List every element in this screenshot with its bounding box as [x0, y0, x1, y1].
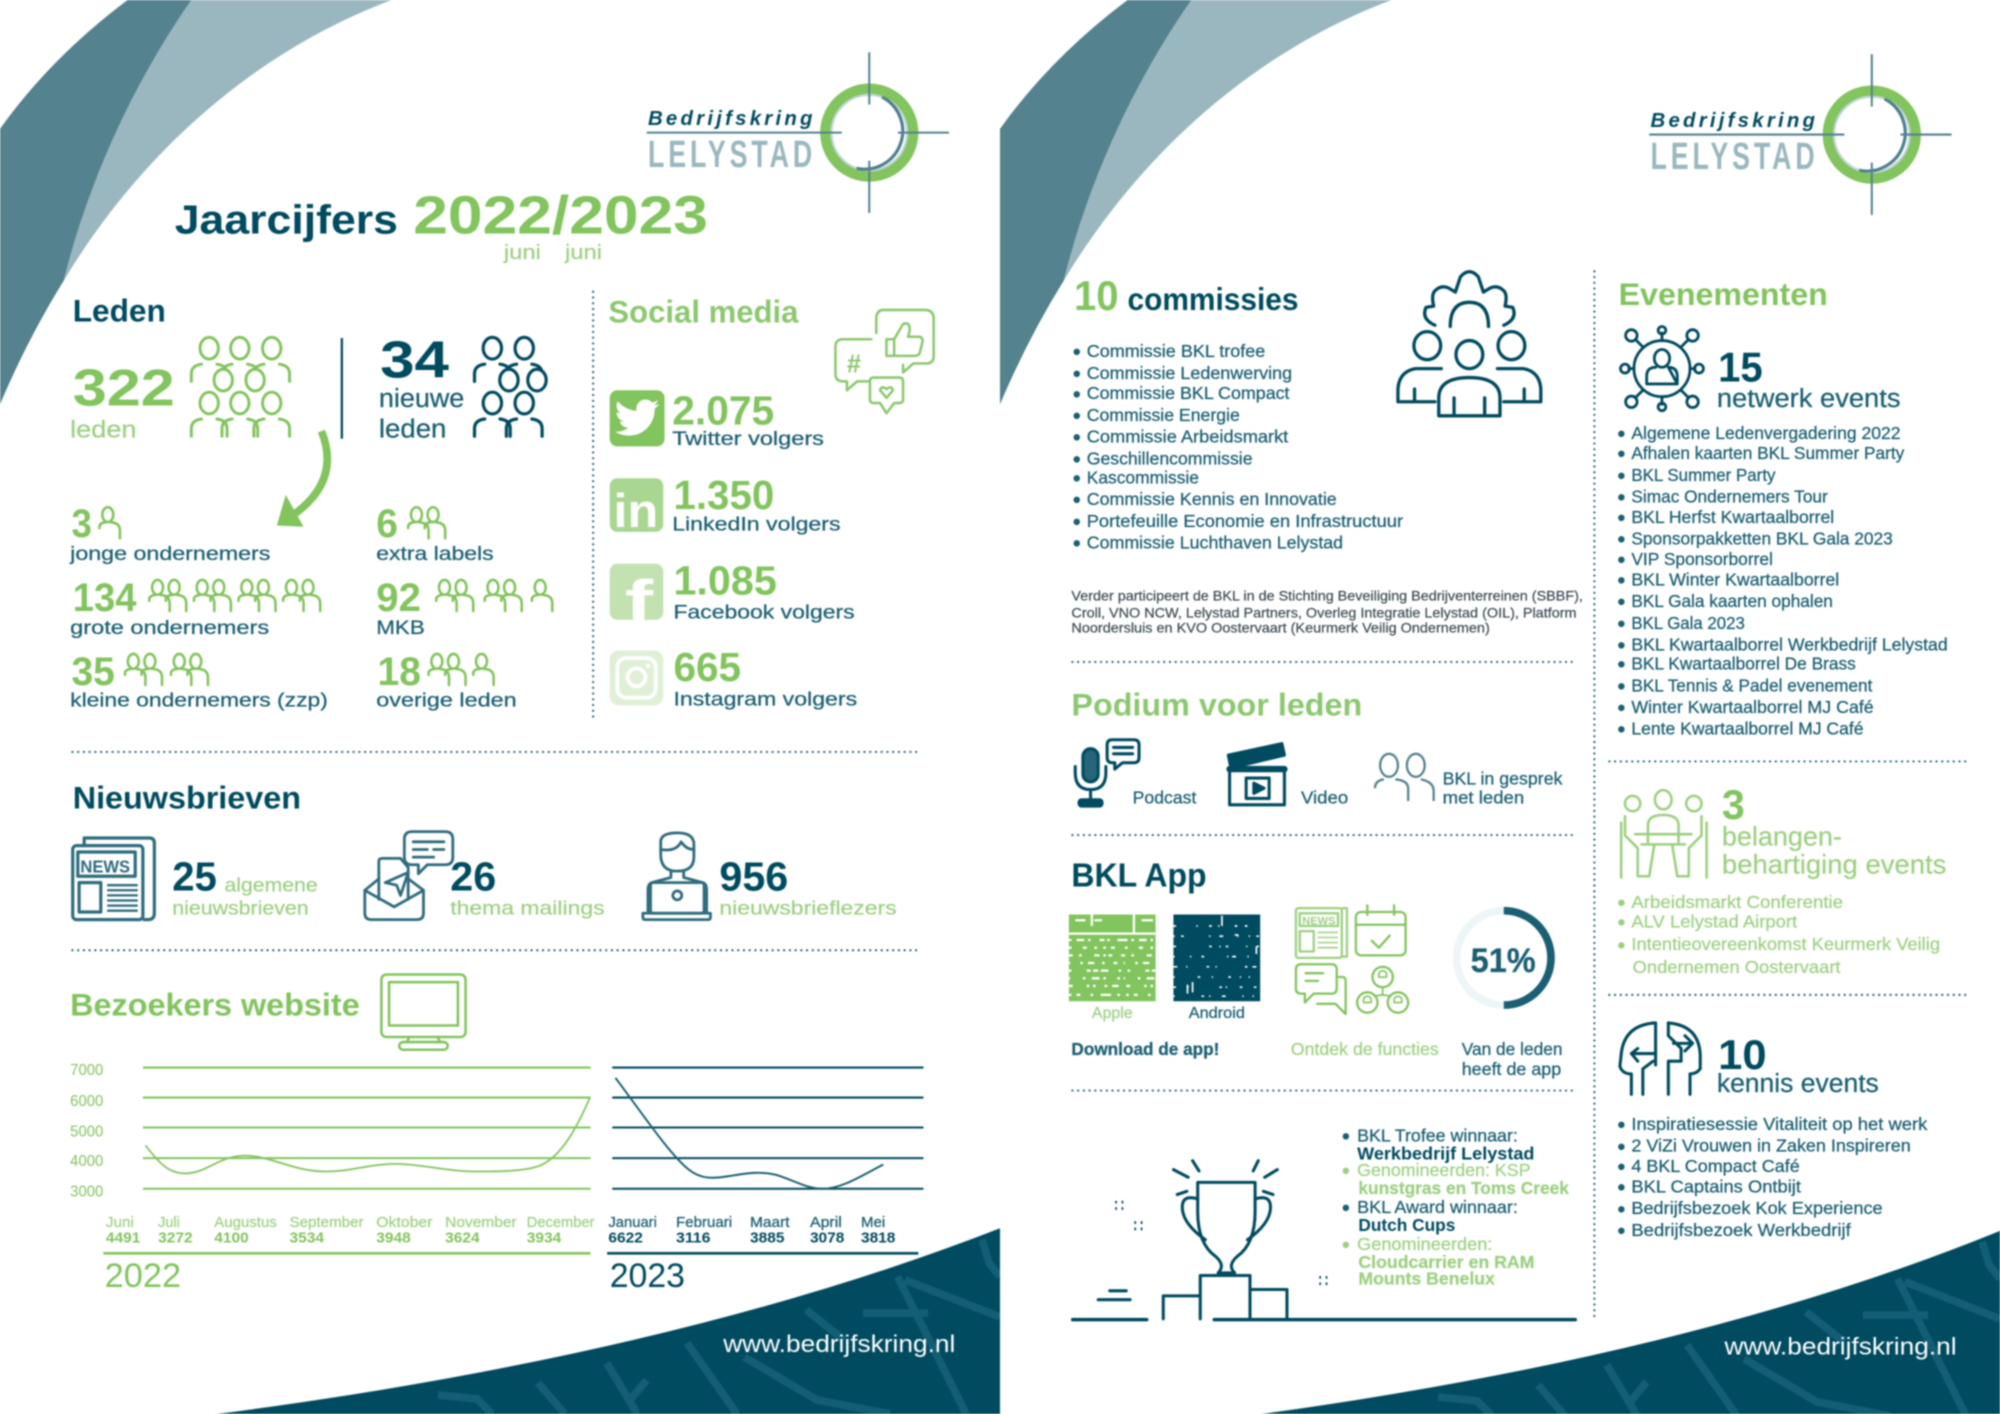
list: trofee and award: Genomineerden: KSP [1357, 1160, 1531, 1180]
icon: reader with laptop [643, 833, 710, 920]
list: kennis events [1617, 1112, 1928, 1243]
logo: Bedrijfskring Lelystad, page 2: LELYSTAD [1650, 134, 1815, 177]
list: commissies [1073, 339, 1403, 556]
label: bkl in gesprek met leden [1443, 768, 1563, 808]
list: commissies: • [1073, 360, 1081, 386]
heading: 10 commissies: 10 [1074, 272, 1119, 319]
list: kennis events: • [1617, 1217, 1625, 1243]
title: Jaarcijfers [175, 196, 398, 242]
stat: 26 thema mailings: 26 [450, 853, 496, 899]
icon: network events [1621, 327, 1703, 411]
title: juni [564, 242, 602, 264]
list: kennis events: • [1617, 1154, 1625, 1180]
list: commissies: Commissie Luchthaven Lelystad [1087, 532, 1343, 552]
stat: extra labels [376, 502, 494, 565]
list: trofee and award [1342, 1123, 1569, 1288]
line chart: visitors 2022: 2022 [105, 1257, 181, 1295]
list: kennis events: • [1617, 1196, 1625, 1222]
stat: 10 kennis events: 10 [1718, 1031, 1767, 1078]
list: commissies: Commissie BKL Compact [1087, 383, 1290, 403]
list: netwerk events: • [1617, 441, 1625, 467]
stat: 25 algemene nieuwsbrieven [172, 853, 318, 920]
line chart: visitors 2023: 3116 [676, 1230, 710, 1246]
list: trofee and award: Mounts Benelux [1358, 1268, 1495, 1288]
icon: heads with arrows [1620, 1023, 1700, 1094]
label: download de app: Download de app! [1071, 1039, 1219, 1059]
line chart: visitors 2022: Juni [106, 1215, 134, 1231]
line chart: visitors 2023: Februari [676, 1215, 732, 1231]
list: commissies: • [1073, 465, 1081, 491]
heading: podium voor leden: Podium voor leden [1071, 687, 1362, 723]
donut chart: 51% [1457, 911, 1551, 1005]
stat: 34 nieuwe leden: leden [379, 415, 446, 443]
line chart: visitors 2022: 6000 [70, 1093, 103, 1110]
list: netwerk events: BKL Gala 2023 [1631, 613, 1745, 633]
list: netwerk events: Algemene Ledenvergadering 2022 [1631, 423, 1900, 443]
line chart: visitors 2022: 4491 [106, 1230, 140, 1246]
list: netwerk events: VIP Sponsorborrel [1631, 549, 1773, 569]
heading: 10 commissies [1074, 272, 1298, 319]
list: trofee and award: Cloudcarrier en RAM [1358, 1252, 1534, 1272]
line chart: visitors 2022: 4100 [214, 1230, 249, 1246]
stat: 322 leden: 322 [73, 360, 175, 418]
panel: kennis events [1617, 1023, 1928, 1243]
list: trofee and award: BKL Award winnaar: [1357, 1197, 1518, 1217]
stat: 956 nieuwsbrieflezers: nieuwsbrieflezers [719, 898, 897, 920]
stat: 15 netwerk events: 15 [1718, 343, 1763, 390]
panel: leden [69, 292, 552, 712]
stat: extra labels: 6 [376, 502, 398, 546]
list: commissies: • [1073, 487, 1081, 513]
stat: grote ondernemers: grote ondernemers [70, 617, 269, 639]
stat: 15 netwerk events [1717, 343, 1900, 413]
label: van de leden heeft de app [1462, 1039, 1562, 1079]
list: trofee and award: kunstgras en Toms Creek [1358, 1178, 1569, 1198]
list: kennis events: BKL Captains Ontbijt [1631, 1177, 1801, 1197]
list: netwerk events: BKL Tennis & Padel evenement [1631, 675, 1873, 695]
list: kennis events: • [1617, 1112, 1625, 1138]
line chart: visitors 2023: 3078 [810, 1230, 844, 1246]
stat: grote ondernemers: 134 [73, 576, 137, 620]
text block: participation note [1071, 588, 1583, 636]
line chart: visitors 2022: 3948 [376, 1230, 411, 1246]
list: netwerk events: • [1617, 547, 1625, 573]
icon: crowd dark [475, 337, 546, 436]
list: kennis events: • [1617, 1133, 1625, 1159]
label: android: Android [1189, 1005, 1245, 1022]
list: netwerk events: BKL Kwartaalborrel Werkbedrijf Lelystad [1631, 634, 1948, 654]
icon: meeting table [1621, 790, 1707, 878]
label: podcast: Podcast [1133, 788, 1197, 808]
stat: twitter: 2.075 [672, 388, 774, 434]
arrow [277, 431, 327, 527]
label: van de leden heeft de app: heeft de app [1462, 1059, 1561, 1079]
list: commissies: • [1073, 402, 1081, 428]
line chart: visitors 2023: Januari [608, 1215, 657, 1231]
list: netwerk events: • [1617, 716, 1625, 742]
stat: jonge ondernemers: 3 [71, 502, 92, 546]
title [175, 186, 708, 264]
list: commissies: Kascommissie [1087, 467, 1199, 487]
line chart: visitors 2022: Juli [158, 1215, 180, 1231]
heading: bkl app: BKL App [1071, 857, 1207, 894]
list: netwerk events: • [1617, 462, 1625, 488]
stat: 26 thema mailings: thema mailings [450, 898, 605, 920]
stat: instagram: 665 [673, 644, 741, 690]
list: netwerk events: BKL Gala kaarten ophalen [1631, 591, 1833, 611]
donut chart: 51%: 51% [1471, 942, 1536, 980]
stat: 34 nieuwe leden: 34 [380, 332, 449, 390]
line chart: visitors 2022: 3000 [70, 1183, 103, 1200]
title: juni [503, 242, 541, 264]
line chart: visitors 2023: 3885 [750, 1230, 784, 1246]
icon: monitor [381, 974, 466, 1050]
stat: kleine ondernemers: kleine ondernemers (zzp) [70, 690, 328, 712]
icon: app functions [1296, 904, 1408, 1014]
list: belangenbehartiging [1617, 890, 1940, 977]
heading: 10 commissies: commissies [1128, 281, 1298, 317]
stat: 10 kennis events: kennis events [1717, 1070, 1879, 1098]
list: trofee and award: Dutch Cups [1358, 1215, 1455, 1235]
list: netwerk events: BKL Summer Party [1631, 465, 1776, 485]
text block: participation note: Verder participeert de BKL in de Stichting Beveiliging Bedrijventerreinen (SBBF), [1071, 588, 1583, 604]
stat: 25 algemene nieuwsbrieven: nieuwsbrieven [172, 898, 309, 920]
list: commissies: • [1073, 424, 1081, 450]
icon: crowd green [191, 337, 290, 436]
stat: twitter: Twitter volgers [672, 428, 824, 450]
line chart: visitors 2023: 3818 [861, 1230, 895, 1246]
panel: nieuwsbrieven [73, 780, 897, 920]
stat: facebook [610, 557, 855, 634]
list: netwerk events: • [1617, 610, 1625, 636]
list: commissies: Commissie Ledenwerving [1087, 363, 1292, 383]
list: kennis events: 4 BKL Compact Café [1631, 1156, 1800, 1176]
panel: bkl app [1069, 857, 1562, 1079]
list: netwerk events: • [1617, 589, 1625, 615]
list: netwerk events: • [1617, 504, 1625, 530]
list: belangenbehartiging: • [1617, 932, 1625, 958]
list: trofee and award: Genomineerden: [1357, 1234, 1492, 1254]
list: belangenbehartiging: Intentieovereenkomst Keurmerk Veilig [1631, 934, 1940, 954]
list: commissies: Commissie Energie [1087, 405, 1240, 425]
qr code: android [1173, 915, 1260, 1001]
list: commissies: • [1073, 381, 1081, 407]
panel: bezoekers website [70, 974, 923, 1295]
stat: grote ondernemers [70, 576, 320, 639]
list: netwerk events: BKL Winter Kwartaalborrel [1631, 569, 1839, 589]
stat: linkedin: in [614, 485, 658, 538]
line chart: visitors 2023: April [810, 1215, 842, 1231]
stat: extra labels: extra labels [376, 543, 494, 565]
label: van de leden heeft de app: Van de leden [1462, 1039, 1562, 1059]
list: trofee and award: BKL Trofee winnaar: [1357, 1126, 1518, 1146]
icon: newspaper: NEWS [80, 856, 130, 876]
list: netwerk events: BKL Kwartaalborrel De Brass [1631, 654, 1856, 674]
stat: jonge ondernemers [69, 502, 271, 565]
list: belangenbehartiging: • [1617, 909, 1625, 935]
list: belangenbehartiging: ALV Lelystad Airport [1631, 911, 1797, 931]
stat: 34 nieuwe leden: nieuwe [379, 385, 464, 413]
line chart: visitors 2022: 3272 [158, 1230, 193, 1246]
list: commissies: • [1073, 446, 1081, 472]
list: netwerk events: Winter Kwartaalborrel MJ Café [1631, 697, 1874, 717]
list: netwerk events: • [1617, 651, 1625, 677]
icon: app functions: NEWS [1302, 916, 1335, 928]
stat: 956 nieuwsbrieflezers: 956 [719, 853, 788, 899]
list: trofee and award: Werkbedrijf Lelystad [1357, 1143, 1534, 1163]
label: bkl in gesprek met leden: met leden [1443, 788, 1524, 808]
label: video: Video [1301, 788, 1348, 808]
list: commissies: • [1073, 339, 1081, 365]
icon: conversation people [1375, 754, 1434, 801]
list: kennis events: • [1617, 1174, 1625, 1200]
list: kennis events: Inspiratiesessie Vitaliteit op het werk [1631, 1114, 1928, 1134]
icon: envelope mailing [365, 832, 453, 920]
icon: social bubbles [835, 310, 934, 413]
line chart: visitors 2023: Maart [750, 1215, 790, 1231]
stat: 3 belangenbehartiging events: 3 [1722, 781, 1745, 828]
icon: video clapper [1228, 744, 1284, 805]
list: belangenbehartiging: Ondernemen Oostervaart [1633, 957, 1841, 977]
list: netwerk events: • [1617, 632, 1625, 658]
icon: trophy on podium [1073, 1161, 1575, 1320]
list: kennis events: 2 ViZi Vrouwen in Zaken Inspireren [1631, 1136, 1911, 1156]
stat: facebook: 1.085 [673, 557, 777, 603]
list: commissies: Commissie Arbeidsmarkt [1087, 427, 1288, 447]
title: 2022/2023 [413, 186, 708, 245]
stat: 10 kennis events [1717, 1031, 1879, 1098]
stat: kleine ondernemers: 35 [71, 650, 115, 694]
line chart: visitors 2022: 5000 [70, 1123, 103, 1140]
stat: 322 leden: leden [70, 416, 136, 443]
icon: newspaper [73, 838, 154, 920]
line chart: visitors 2023: 2023 [610, 1257, 685, 1295]
divider [341, 338, 343, 439]
background shape: bottom right wave, page 2 [1261, 1231, 2000, 1414]
stat: linkedin: 1.350 [673, 472, 774, 518]
panel: social media [608, 294, 934, 710]
list: commissies: • [1073, 530, 1081, 556]
stat: facebook: Facebook volgers [673, 602, 855, 624]
list: commissies: • [1073, 508, 1081, 534]
line chart: visitors 2023 [607, 1068, 923, 1295]
background shape: top left swoosh, page 2 [1000, 0, 1392, 404]
stat: linkedin: LinkedIn volgers [672, 514, 841, 536]
list: commissies: Commissie BKL trofee [1087, 341, 1265, 361]
panel: podium voor leden [1071, 687, 1563, 808]
icon: social bubbles: # [847, 350, 861, 378]
line chart: visitors 2022: 3534 [290, 1230, 325, 1246]
text block: participation note: Croll, VNO NCW, Lelystad Partners, Overleg Integratie Lelystad (OIL), Platform [1071, 604, 1577, 620]
stat: 34 nieuwe leden [379, 332, 464, 443]
icon: team with gear [1398, 272, 1541, 416]
list: netwerk events: • [1617, 526, 1625, 552]
line chart: visitors 2022: Oktober [376, 1215, 433, 1231]
stat: 25 algemene nieuwsbrieven: algemene [225, 875, 318, 897]
heading: nieuwsbrieven: Nieuwsbrieven [73, 780, 301, 816]
list: netwerk events: Afhalen kaarten BKL Summer Party [1631, 443, 1905, 463]
list: trofee and award: • [1342, 1123, 1350, 1149]
stat: overige leden: overige leden [376, 690, 517, 712]
list: commissies: Commissie Kennis en Innovatie [1087, 489, 1337, 509]
list: belangenbehartiging: • [1617, 890, 1625, 916]
stat: MKB [376, 576, 552, 639]
heading: bezoekers website: Bezoekers website [70, 986, 360, 1022]
panel: commissies [1071, 272, 1583, 636]
list: commissies: Geschillencommissie [1087, 448, 1253, 468]
website url, page 1: www.bedrijfskring.nl [722, 1331, 955, 1358]
line chart: visitors 2022: December [527, 1215, 595, 1231]
qr code: apple [1069, 915, 1156, 1001]
list: netwerk events: • [1617, 420, 1625, 446]
stat: 15 netwerk events: netwerk events [1717, 385, 1900, 413]
stat: 3 belangenbehartiging events: behartiging events [1722, 850, 1946, 880]
stat: twitter [610, 388, 824, 450]
line chart: visitors 2023: Mei [861, 1215, 885, 1231]
logo: Bedrijfskring Lelystad, page 1: LELYSTAD [648, 132, 812, 175]
stat: 322 leden [70, 360, 175, 443]
line chart: visitors 2022: Augustus [214, 1215, 277, 1231]
logo: Bedrijfskring Lelystad, page 2 [1649, 54, 1952, 215]
list: kennis events: Bedrijfsbezoek Kok Experience [1631, 1198, 1883, 1218]
line chart: visitors 2022: 3934 [527, 1230, 562, 1246]
stat: instagram [610, 644, 857, 710]
list: netwerk events: Simac Ondernemers Tour [1631, 487, 1828, 507]
stat: overige leden: 18 [378, 650, 421, 694]
list: netwerk events [1617, 420, 1948, 742]
panel: trofee [1073, 1123, 1575, 1320]
website url, page 2: www.bedrijfskring.nl [1723, 1334, 1957, 1361]
heading: evenementen: Evenementen [1619, 276, 1828, 312]
stat: instagram: Instagram volgers [673, 688, 857, 710]
icon: podcast microphone [1075, 740, 1139, 806]
background shape: top left swoosh, page 1 [0, 0, 392, 404]
stat: facebook: f [625, 569, 654, 634]
list: kennis events: Bedrijfsbezoek Werkbedrijf [1631, 1220, 1851, 1240]
line chart: visitors 2023: 6622 [608, 1230, 643, 1246]
stat: 26 thema mailings [450, 853, 605, 920]
heading: social media: Social media [608, 294, 799, 330]
text block: participation note: Noordersluis en KVO Oostervaart (Keurmerk Veilig Ondernemen) [1071, 620, 1490, 636]
list: netwerk events: • [1617, 567, 1625, 593]
background shape: bottom right wave, page 1 [217, 1228, 1000, 1414]
list: trofee and award: • [1342, 1195, 1350, 1221]
heading: leden: Leden [73, 292, 166, 328]
stat: overige leden [376, 650, 517, 712]
list: commissies: Portefeuille Economie en Infrastructuur [1087, 511, 1403, 531]
stat: linkedin [610, 472, 841, 538]
label: apple: Apple [1092, 1005, 1133, 1022]
stat: jonge ondernemers: jonge ondernemers [69, 543, 271, 565]
stat: MKB: 92 [376, 576, 421, 620]
stat: 956 nieuwsbrieflezers [719, 853, 897, 920]
list: netwerk events: BKL Herfst Kwartaalborrel [1631, 507, 1834, 527]
stat: 25 algemene nieuwsbrieven: 25 [172, 853, 217, 899]
stat: kleine ondernemers [70, 650, 328, 712]
line chart: visitors 2022 [70, 1062, 595, 1295]
logo: Bedrijfskring Lelystad, page 1: Bedrijfskring [648, 108, 813, 130]
line chart: visitors 2022: 4000 [70, 1153, 103, 1170]
list: belangenbehartiging: Arbeidsmarkt Conferentie [1631, 892, 1843, 912]
label: ontdek de functies: Ontdek de functies [1291, 1039, 1439, 1059]
line chart: visitors 2022: 3624 [445, 1230, 480, 1246]
stat: 3 belangenbehartiging events [1722, 781, 1946, 880]
list: netwerk events: • [1617, 673, 1625, 699]
list: netwerk events: Sponsorpakketten BKL Gala 2023 [1631, 529, 1893, 549]
panel: evenementen [1617, 276, 1948, 742]
stat: 3 belangenbehartiging events: belangen- [1722, 822, 1842, 852]
logo: Bedrijfskring Lelystad, page 1 [647, 52, 949, 213]
logo: Bedrijfskring Lelystad, page 2: Bedrijfskring [1650, 110, 1816, 132]
line chart: visitors 2022: September [290, 1215, 364, 1231]
label: bkl in gesprek met leden: BKL in gesprek [1443, 768, 1563, 788]
line chart: visitors 2022: 7000 [70, 1062, 103, 1079]
list: netwerk events: • [1617, 695, 1625, 721]
list: trofee and award: • [1342, 1158, 1350, 1184]
list: trofee and award: • [1342, 1232, 1350, 1258]
list: netwerk events: Lente Kwartaalborrel MJ Café [1631, 719, 1864, 739]
list: netwerk events: • [1617, 484, 1625, 510]
stat: MKB: MKB [376, 617, 425, 639]
line chart: visitors 2022: November [445, 1215, 517, 1231]
panel: belangenbehartiging events [1617, 781, 1946, 977]
